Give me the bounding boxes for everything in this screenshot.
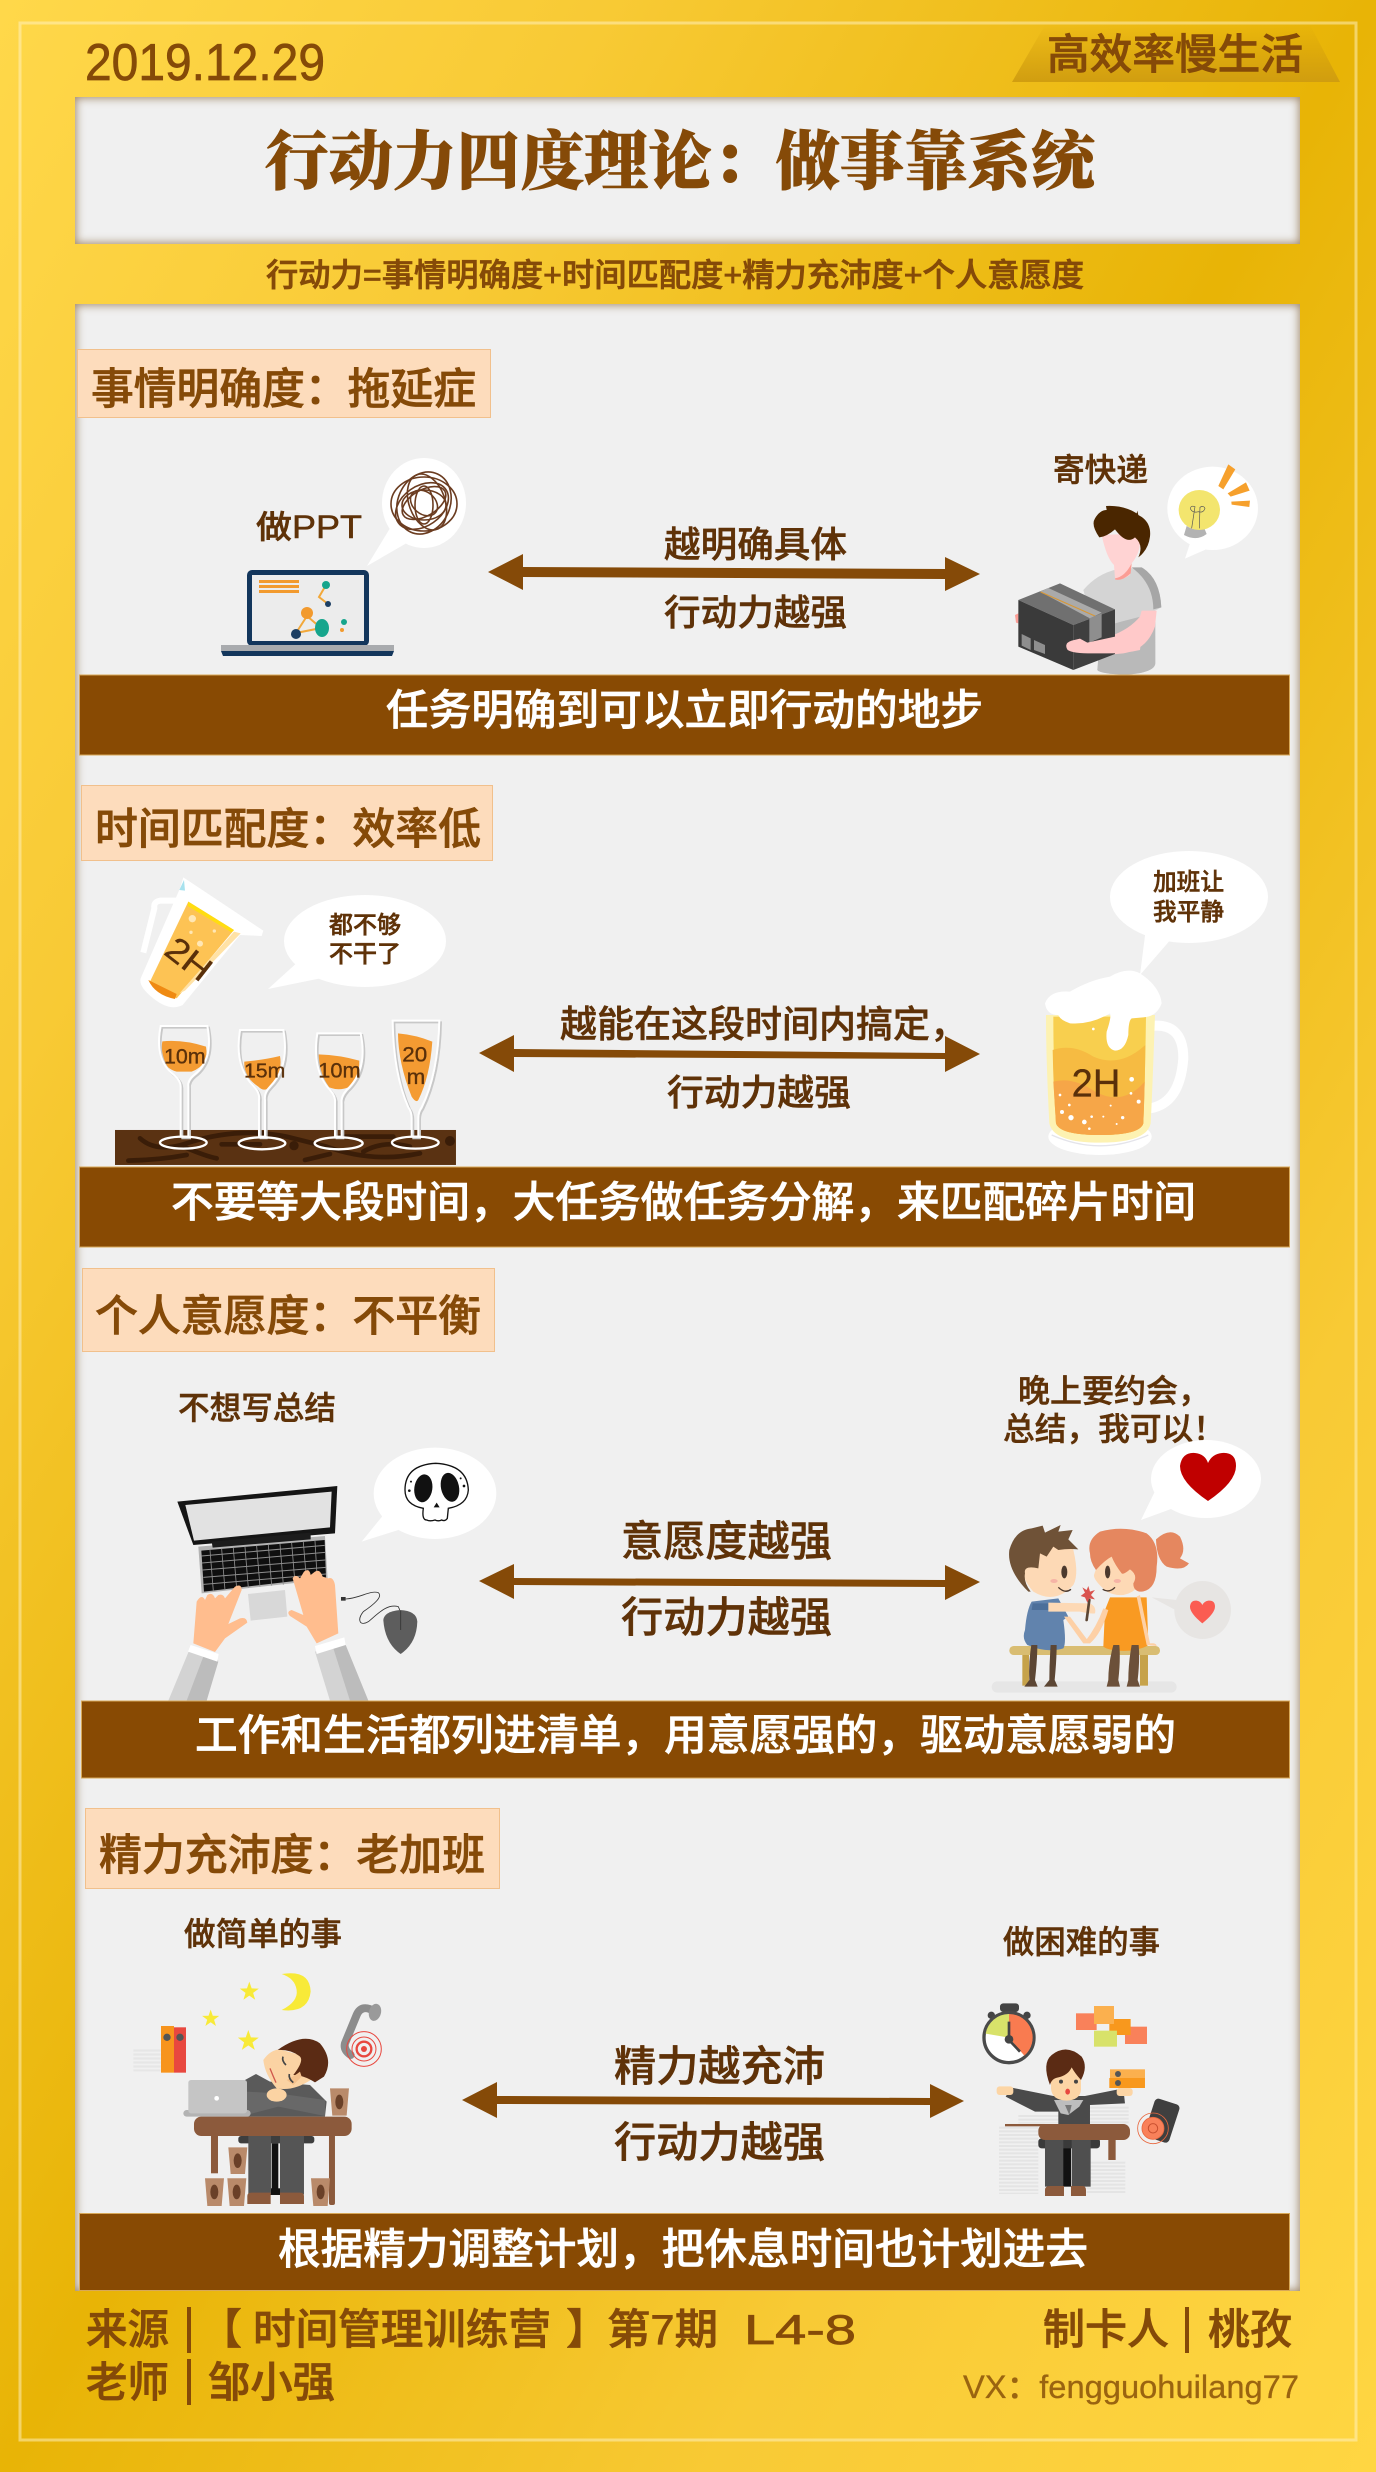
arrow: double xyxy=(488,554,980,591)
takeaway bar xyxy=(82,1701,1290,1778)
text: 越明确具体: 越明确具体 xyxy=(664,524,847,565)
heading tag: 精力充沛度：老加班 xyxy=(99,1832,485,1880)
illustration: typing on laptop xyxy=(168,1486,417,1701)
heading tag xyxy=(78,350,490,418)
illustration: jug xyxy=(140,877,263,1007)
source: 【 xyxy=(200,2306,242,2353)
text: 晚上要约会: 晚上要约会， xyxy=(1018,1373,1210,1409)
label: 做简单的事: 做简单的事 xyxy=(184,1916,342,1952)
icon: scribble bubble xyxy=(367,458,466,566)
maker xyxy=(1043,2306,1292,2353)
illustration: beer mug xyxy=(1045,971,1183,1155)
wine glass: 10m: 10m xyxy=(164,1044,206,1068)
illustration: glasses on table xyxy=(115,1021,456,1165)
icon: laptop xyxy=(183,2080,251,2117)
illustration: beer mug: 2H xyxy=(1072,1063,1120,1106)
takeaway bar: 工作和生活都列进清单，用意愿强的，驱动意愿弱的 xyxy=(195,1713,1176,1760)
champagne glass: 20m xyxy=(392,1021,441,1149)
source xyxy=(86,2306,856,2353)
torso and arms xyxy=(997,2069,1145,2125)
speech bubble: 都不够不干了: 不干了 xyxy=(329,941,401,968)
takeaway bar xyxy=(80,1167,1290,1247)
icon: laptop xyxy=(221,570,394,656)
source: L4-8 xyxy=(744,2306,856,2353)
takeaway bar: 不要等大段时间，大任务做任务分解，来匹配碎片时间 xyxy=(171,1180,1196,1227)
arrow: double xyxy=(462,2082,964,2118)
speech bubble: 加班让我平静 xyxy=(1110,851,1268,975)
illustration: jug: 2H xyxy=(158,930,219,989)
section: 时间匹配度 xyxy=(80,786,1290,1247)
champagne glass: 20m: 20 xyxy=(402,1042,427,1066)
legs and chair xyxy=(1038,2138,1100,2196)
panel: title card xyxy=(75,97,1300,244)
text: 意愿度越强: 意愿度越强 xyxy=(621,1518,832,1565)
formula: 行动力=事情明确度+时间匹配度+精力充沛度+个人意愿度 xyxy=(266,257,1084,293)
section: 事情明确度 xyxy=(78,350,1290,755)
illustration: person with parcel xyxy=(1015,506,1161,675)
title: 行动力四度理论：做事靠系统 xyxy=(265,127,1100,198)
wine glass: 15m: 15m xyxy=(244,1060,285,1082)
heading tag xyxy=(82,1268,494,1352)
speech bubble: 加班让我平静: 加班让 xyxy=(1153,869,1224,896)
label: 不想写总结: 不想写总结 xyxy=(178,1390,336,1426)
label: 寄快递: 寄快递 xyxy=(1053,452,1148,488)
icon: binders xyxy=(161,2026,186,2073)
sleeve and hand: right xyxy=(288,1570,368,1701)
takeaway bar: 根据精力调整计划，把休息时间也计划进去 xyxy=(278,2227,1088,2274)
maker: 制卡人 xyxy=(1043,2306,1169,2353)
heading tag xyxy=(86,1808,500,1888)
icon: mouse xyxy=(341,1592,417,1654)
ribbon: brand: 高效率慢生活 xyxy=(1047,31,1303,78)
speech bubble: 都不够不干了: 都不够 xyxy=(329,912,401,939)
text: 精力越充沛: 精力越充沛 xyxy=(614,2043,825,2090)
footer: credits xyxy=(86,2306,1299,2406)
section: 精力充沛度 xyxy=(80,1808,1290,2290)
takeaway bar: 任务明确到可以立即行动的地步 xyxy=(386,688,983,735)
girl xyxy=(1085,1529,1189,1687)
section: 个人意愿度 xyxy=(82,1268,1290,1778)
date: 2019.12.29 xyxy=(85,34,325,92)
boy xyxy=(1009,1525,1095,1687)
arrow: double xyxy=(479,1564,980,1600)
label: 做PPT: 做PPT xyxy=(256,509,362,545)
wine glass: 10m second: 10m xyxy=(318,1058,361,1082)
teacher: 老师 xyxy=(86,2359,169,2406)
source: 】 xyxy=(566,2306,608,2353)
illustration: busy man at desk xyxy=(984,2003,1181,2196)
illustration: tired man at desk xyxy=(147,1973,383,2206)
panel: main content xyxy=(75,304,1300,2291)
wine glass: 10m second xyxy=(315,1033,364,1149)
desk xyxy=(1005,2124,1130,2160)
text: 行动力越强: 行动力越强 xyxy=(621,1594,832,1641)
icon: idea bubble xyxy=(1167,464,1258,559)
champagne glass: 20m: m xyxy=(407,1065,425,1089)
takeaway bar xyxy=(80,2214,1290,2290)
teacher: 邹小强 xyxy=(208,2359,335,2406)
text: 行动力越强: 行动力越强 xyxy=(664,592,847,633)
heading tag: 事情明确度：拖延症 xyxy=(91,366,476,414)
wine glass: 10m xyxy=(159,1026,211,1149)
ribbon: brand xyxy=(1012,25,1340,82)
text: 行动力越强: 行动力越强 xyxy=(667,1072,851,1113)
wine glass: 15m xyxy=(239,1030,287,1149)
coffee cups xyxy=(205,2088,349,2206)
icon: ringing phone xyxy=(1138,2098,1181,2144)
laptop xyxy=(177,1486,337,1621)
arrow: double xyxy=(479,1035,980,1072)
head xyxy=(1046,2050,1085,2101)
label: 做困难的事: 做困难的事 xyxy=(1003,1924,1160,1960)
desk and legs xyxy=(211,2133,335,2205)
body and head xyxy=(245,2039,328,2117)
speech bubble: 加班让我平静: 我平静 xyxy=(1153,899,1224,926)
speech bubble: heart xyxy=(1141,1440,1261,1520)
text: 越能在这段时间内搞定: 越能在这段时间内搞定， xyxy=(560,1004,967,1045)
heading tag: 个人意愿度：不平衡 xyxy=(95,1293,481,1341)
icon: ringing phone xyxy=(345,2002,383,2066)
text: 总结我可以: 总结，我可以！ xyxy=(1003,1411,1225,1447)
wechat: VX：fengguohuilang77 xyxy=(963,2369,1299,2405)
text: 行动力越强: 行动力越强 xyxy=(614,2119,825,2166)
table xyxy=(115,1130,456,1165)
maker: 桃孜 xyxy=(1208,2306,1292,2353)
speech bubble: small heart xyxy=(1152,1581,1231,1639)
icon: moon and stars xyxy=(202,1973,311,2050)
speech bubble: skull xyxy=(362,1448,496,1542)
source: 第7期 xyxy=(607,2306,718,2353)
illustration: couple on bench xyxy=(992,1525,1189,1693)
icon: sticky notes xyxy=(1076,2006,1147,2047)
icon: stopwatch xyxy=(984,2003,1034,2063)
takeaway bar xyxy=(80,675,1290,755)
sleeve and hand: left xyxy=(168,1586,247,1701)
source: 来源 xyxy=(86,2306,169,2353)
heading tag xyxy=(82,786,492,860)
teacher xyxy=(86,2359,335,2406)
source: 时间管理训练营 xyxy=(253,2306,551,2353)
speech bubble: 都不够不干了 xyxy=(268,895,446,989)
heading tag: 时间匹配度：效率低 xyxy=(95,806,481,854)
